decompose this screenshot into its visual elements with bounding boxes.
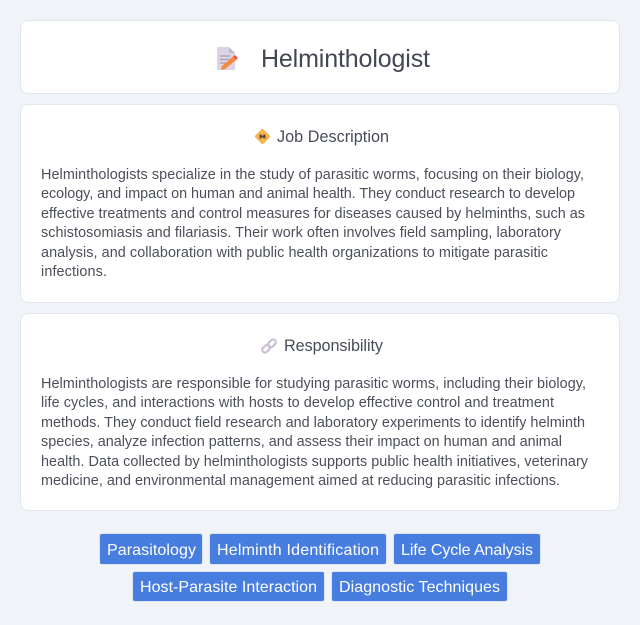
text block: job description [41, 167, 585, 280]
text block: responsibility [41, 376, 589, 489]
tag: Parasitology: Parasitology [107, 542, 196, 559]
tag: Helminth Identification [209, 533, 387, 565]
text block: responsibility: Helminthologists are responsible for studying parasitic worms, including their biology, [41, 376, 586, 392]
tag: Host-Parasite Interaction [132, 571, 325, 602]
text block: job description: Helminthologists specialize in the study of parasitic worms, focusing on their biology, [41, 167, 584, 183]
icon: document with pencil [217, 47, 238, 70]
heading: job description: Job Description [277, 128, 389, 146]
tag: Helminth Identification: Helminth Identification [217, 542, 379, 559]
text block: job description: ecology, and impact on human and animal health. They conduct research to develop [41, 186, 575, 202]
icon: job diamond [254, 128, 270, 144]
text block: responsibility: methods. They conduct field research and laboratory experiments to identify helminth [41, 415, 585, 431]
text block: responsibility: health. Data collected by helminthologists supports public health initiatives, veterinary [41, 454, 589, 470]
title: Helminthologist [261, 45, 430, 73]
tag: Life Cycle Analysis: Life Cycle Analysis [401, 542, 533, 559]
text block: job description: infections. [41, 264, 107, 280]
tag: Diagnostic Techniques: Diagnostic Techniques [339, 579, 500, 596]
panel: title header [20, 20, 620, 94]
tag: Life Cycle Analysis [393, 533, 541, 565]
panel: job description [20, 104, 620, 303]
text block: job description: effective treatments and control measures for diseases caused by helminths, such as [41, 206, 585, 222]
text block: job description: analysis, and collaboration with public health organizations to mitigate parasitic [41, 245, 548, 261]
text block: job description: schistosomiasis and filariasis. Their work often involves field sampling, laboratory [41, 225, 562, 241]
tag: Host-Parasite Interaction: Host-Parasite Interaction [140, 579, 317, 596]
text block: responsibility: species, analyze infection patterns, and assess their impact on human and animal [41, 434, 562, 450]
tag: Diagnostic Techniques [331, 571, 508, 602]
text block: responsibility: life cycles, and interactions with hosts to develop effective control and treatment [41, 395, 554, 411]
icon: chain link [261, 338, 277, 354]
heading: responsibility: Responsibility [284, 337, 384, 355]
text block: responsibility: medicine, and environmental management aimed at reducing parasitic infections. [41, 473, 560, 489]
tag: Parasitology [99, 533, 203, 565]
panel: responsibility [20, 313, 620, 511]
